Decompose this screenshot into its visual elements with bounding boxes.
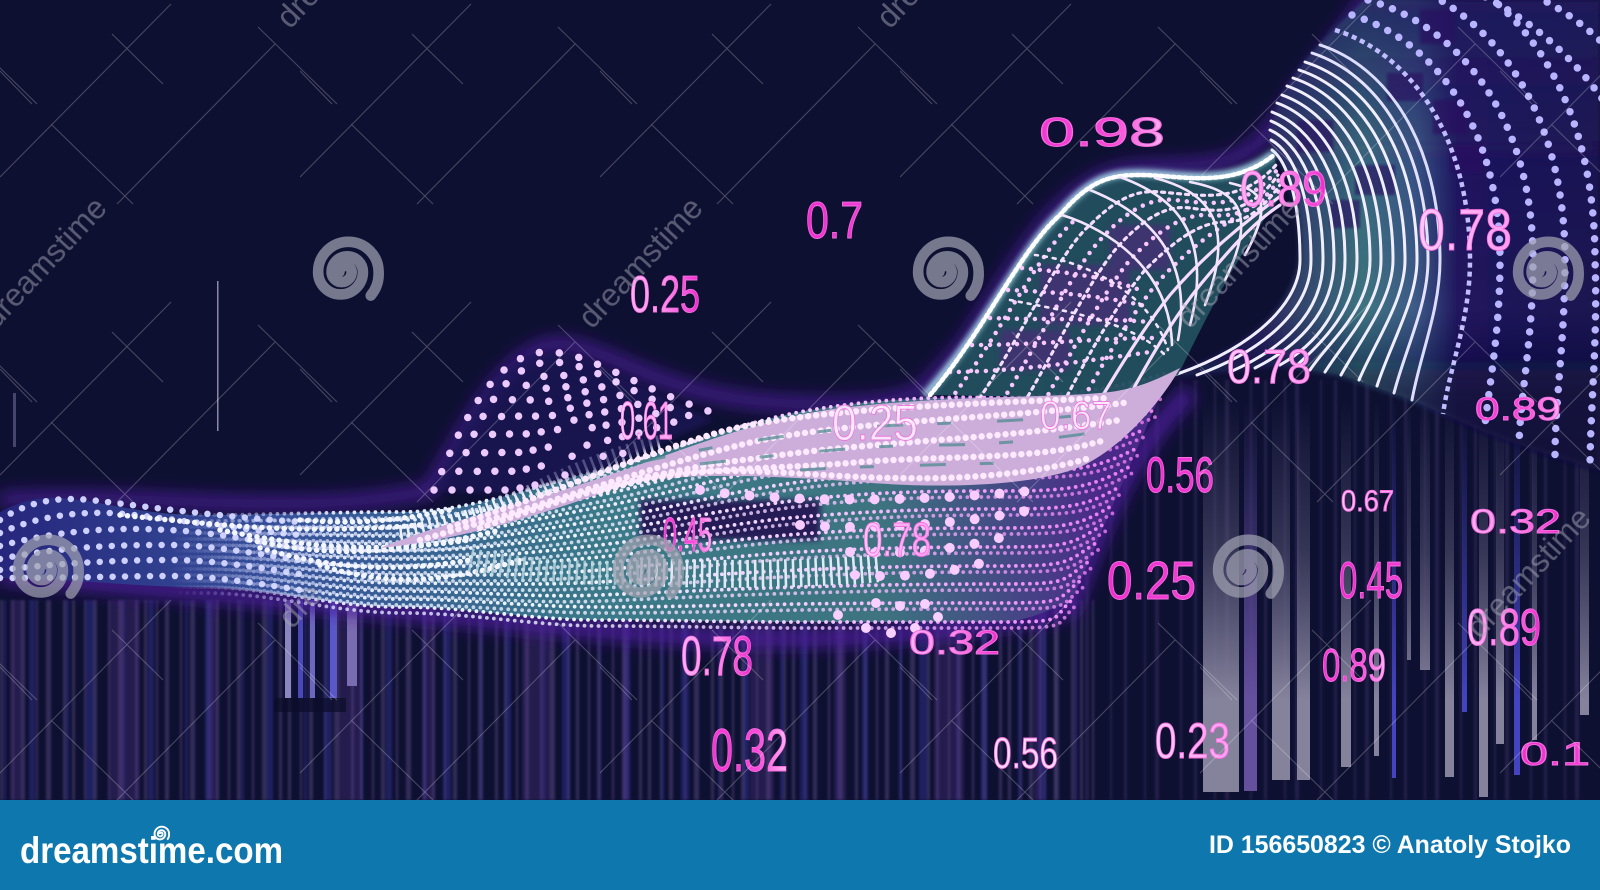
data value labels: 0.78: [1227, 341, 1311, 394]
tall bars lower right: [1203, 400, 1589, 797]
watermark words: [0, 0, 1598, 645]
bright left section of band: [120, 510, 520, 579]
data value labels: [620, 109, 1590, 784]
data value labels: 0.45: [663, 509, 712, 562]
footer logo: dreamstime.com: [20, 830, 283, 871]
fan solid arcs: [1165, 30, 1470, 414]
watermark words: dreamstime: [1169, 190, 1308, 335]
data value labels: 0.89: [1240, 161, 1327, 217]
data value labels: 0.25: [630, 266, 700, 324]
watermark spirals: [18, 242, 1579, 594]
left hump of dots: [434, 352, 714, 495]
background vertical stripes, lower right: [1040, 380, 1600, 800]
dark glitch patch: [640, 500, 820, 540]
dot rows: [178, 372, 1166, 624]
fan vertical shading: [1165, 0, 1600, 470]
data value labels: 0.67: [1341, 485, 1394, 518]
left discrete dot rows: [0, 499, 300, 590]
fan glitch blocks: [1297, 10, 1482, 228]
upper mesh curtain: [925, 153, 1282, 410]
watermark words: dreamstime: [1459, 500, 1598, 645]
curtain cross lines: [1010, 177, 1261, 355]
curtain dotted cross rows: [950, 170, 1281, 410]
data value labels: 0.45: [1339, 552, 1403, 610]
logo spiral: [155, 827, 169, 840]
data value labels: 0.89: [1467, 599, 1541, 657]
purple glow around the wave: [0, 0, 1370, 639]
fan dotted arcs: [1352, 0, 1600, 470]
band base fill: [0, 372, 1170, 622]
data value labels: 0.61: [620, 391, 673, 451]
in-between dot rows: [180, 397, 1162, 630]
footer credit: ID 156650823 © Anatoly Stojko: [1209, 831, 1571, 859]
data value labels: 0.89: [1475, 391, 1561, 427]
curtain fill: [930, 155, 1282, 398]
data value labels: 0.89: [1322, 639, 1386, 691]
data value labels: 0.67: [1040, 394, 1112, 438]
data value labels: 0.25: [1107, 551, 1196, 611]
watermark words: dre: [271, 576, 329, 635]
data value labels: 0.32: [909, 624, 1000, 662]
lower wave band: [0, 372, 1174, 628]
curtain long rows: [930, 155, 1282, 410]
pendant dots below wave: [833, 598, 943, 638]
large scattered glowing dots: [700, 490, 1040, 576]
footer banner: [0, 800, 1600, 890]
data value labels: 0.78: [1418, 198, 1512, 263]
right fan of concentric arcs: [1165, 0, 1600, 470]
data value labels: 0.7: [806, 192, 863, 250]
data value labels: 0.56: [1146, 447, 1214, 503]
short bright bars near left: [13, 281, 357, 712]
bright pink strip of the wave: [380, 368, 1180, 548]
data value labels: 0.78: [863, 514, 931, 567]
white tick waves: [400, 445, 880, 574]
data value labels: 0.1: [1520, 736, 1590, 772]
data value labels: 0.78: [681, 624, 753, 687]
strip teal flecks: [640, 412, 1110, 470]
data value labels: 0.98: [1039, 109, 1165, 155]
curtain purple blotches: [1000, 225, 1170, 370]
watermark words: dreamstime: [571, 190, 710, 335]
background vertical stripes, lower left: [0, 600, 1100, 800]
data value labels: 0.56: [993, 729, 1058, 778]
curtain top glow: [925, 153, 1274, 395]
data value labels: 0.25: [832, 395, 918, 451]
data value labels: 0.32: [1470, 503, 1561, 541]
strip dots: [420, 398, 1130, 540]
data value labels: 0.32: [711, 717, 788, 784]
data value labels: 0.23: [1155, 713, 1230, 769]
